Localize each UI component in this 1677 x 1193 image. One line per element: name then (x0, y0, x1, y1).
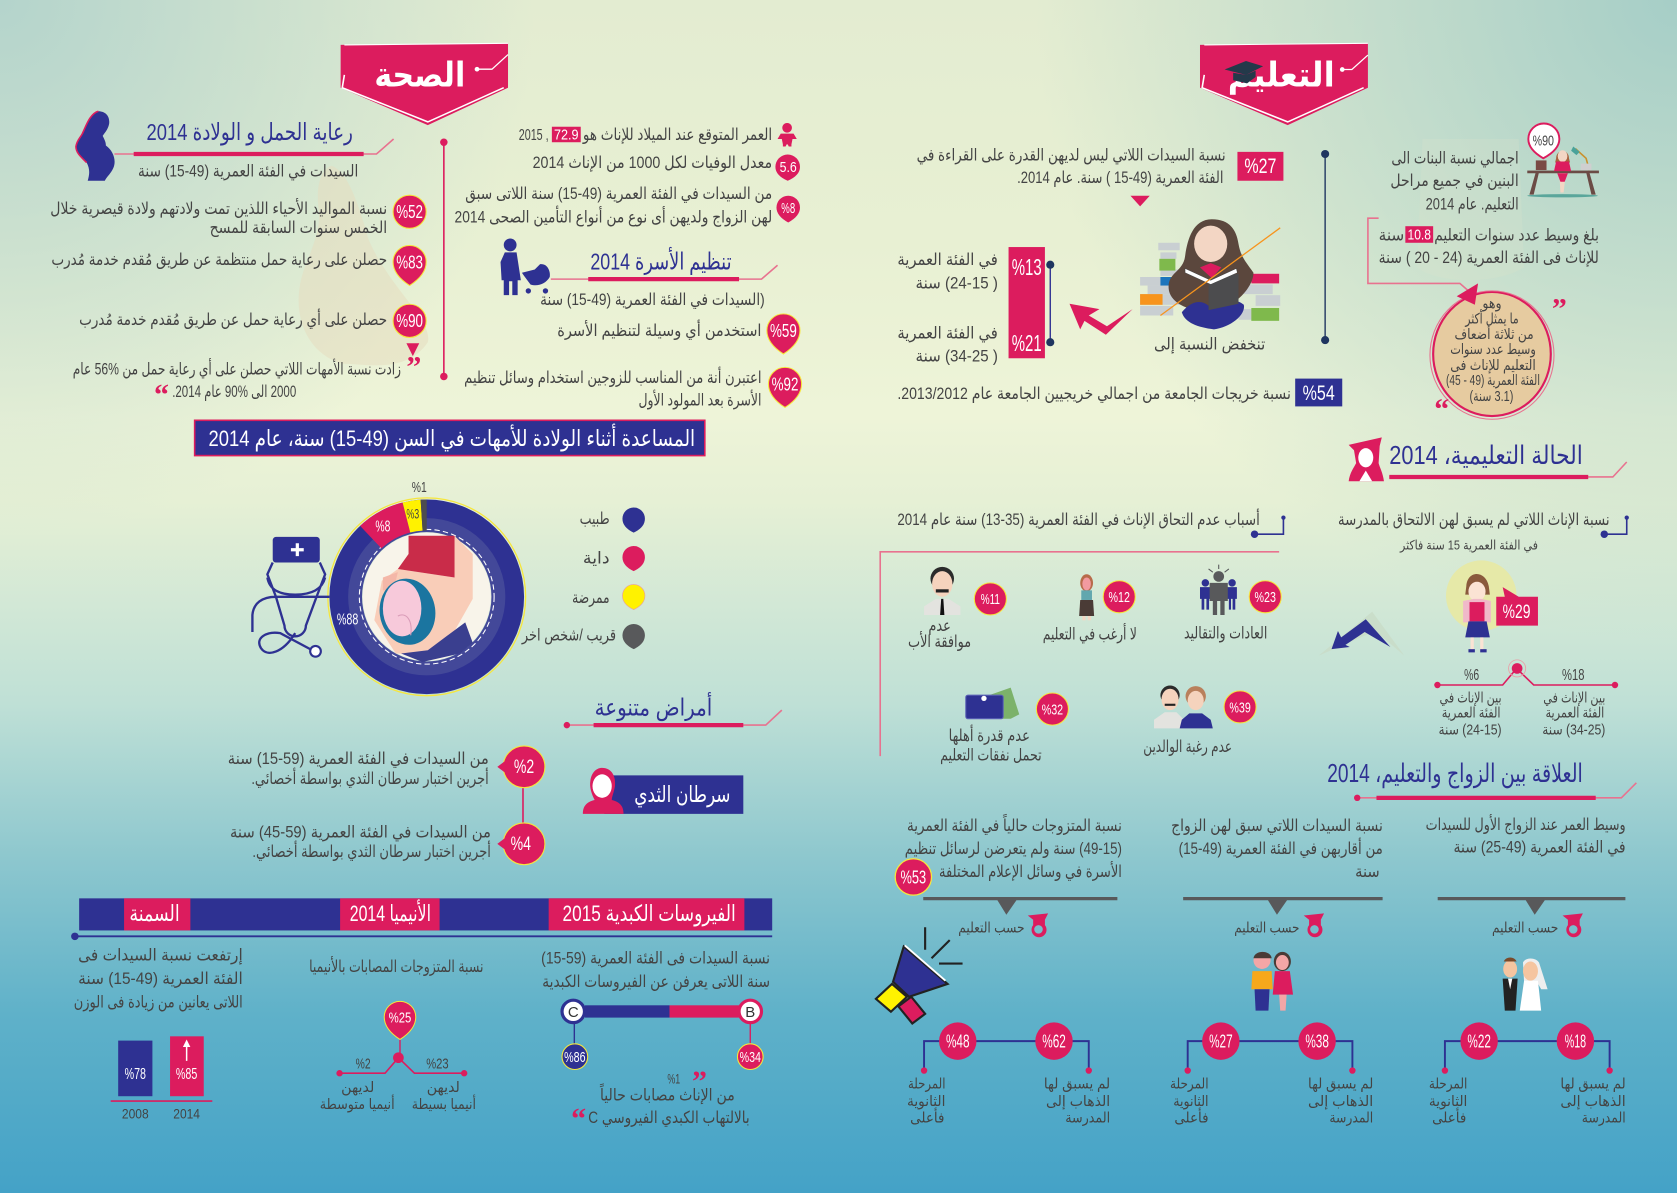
stat 4 (230, 822, 545, 865)
tree: age split: بين الإناث في (1543, 691, 1605, 707)
section: obesity (74, 945, 243, 1122)
stat 90: %90 (396, 311, 423, 331)
tree chart: %23 (426, 1055, 449, 1072)
stat 2: %2 (514, 757, 534, 778)
text: never enrolled: نسبة الإناث اللاتي لم يسبق لهن الالتحاق بالمدرسة (1338, 510, 1610, 530)
label: breast cancer: سرطان الثدي (634, 782, 730, 808)
header bar: obesity, anemia, hepatitis: الفيروسات الكبدية 2015 (563, 901, 736, 927)
heading rule (1389, 462, 1627, 477)
section: various diseases (228, 691, 782, 865)
column: family planning messages: فأعلى (910, 1107, 944, 1126)
tree: age split (1434, 660, 1618, 739)
bracket (1368, 218, 1468, 291)
section: anemia (309, 956, 483, 1113)
stat 27 box (1237, 152, 1283, 181)
stat 59: استخدمن أي وسيلة لتنظيم الأسرة (557, 319, 761, 341)
reason 23: العادات والتقاليد (1184, 623, 1267, 643)
stat 83: حصلن على رعاية حمل منتظمة عن طريق مُقدم خدمة مُدرب (51, 250, 387, 270)
column: family planning messages: %62 (1042, 1032, 1066, 1052)
heading rule (114, 139, 394, 154)
section: general health (455, 123, 800, 227)
legend: doctor: طبيب (580, 509, 610, 528)
callout circle: (3.1 سنة) (1470, 389, 1513, 405)
column: median age at marriage: لم يسبق لها (1560, 1077, 1626, 1093)
heading rule (1354, 783, 1636, 801)
age labels (897, 250, 998, 365)
label 8: %8 (375, 518, 390, 536)
arrow (1319, 612, 1404, 656)
label: breast cancer (583, 768, 743, 814)
icon: graduate woman (1349, 437, 1384, 481)
stat 92: %92 (772, 374, 798, 394)
heading: الحالة التعليمية، 2014 (1389, 442, 1583, 470)
icon: pregnant woman (76, 111, 115, 181)
stat 92: اعتبرن أنة من المناسب للزوجين استخدام وسائل تنظيم (464, 366, 761, 388)
note (571, 1065, 750, 1135)
reason 23: %23 (1255, 589, 1276, 606)
reason 39: عدم رغبة الوالدين (1143, 737, 1232, 757)
text: الفئة العمرية (49-15 ) سنة. عام 2014. (1017, 168, 1224, 188)
icon: girl at desk (1527, 147, 1599, 197)
reason 32 (940, 688, 1068, 765)
column: family planning messages: الأسرة في وسائل الإعلام المختلفة (939, 861, 1122, 882)
stat 83: %83 (396, 252, 423, 272)
icon: baby (778, 123, 797, 147)
banner: health: الصحة (374, 57, 465, 95)
section: marriage and education (876, 760, 1636, 1126)
arrow down (1130, 196, 1150, 206)
legend: midwife: داية (583, 549, 610, 568)
column: median age at marriage: %22 (1467, 1032, 1491, 1052)
header bar: obesity, anemia, hepatitis: السمنة (129, 901, 180, 926)
stat 92 (464, 366, 802, 410)
life expectancy (519, 125, 772, 145)
text: بلغ وسيط عدد سنوات التعليم (1434, 226, 1599, 246)
column: relatives marriage: من أقاربهن في الفئة العمرية (49-15) (1179, 837, 1383, 859)
stat 4: أجرين اختبار سرطان الثدي بواسطة أخصائي. (252, 840, 491, 862)
reason 11 (908, 567, 1006, 652)
label 1: %1 (412, 479, 427, 496)
section: educational status (880, 437, 1629, 765)
hepatitis bar (562, 1000, 763, 1069)
reason 32: تحمل نفقات التعليم (940, 745, 1042, 765)
text: سنة (1379, 226, 1404, 245)
text: never enrolled (1338, 510, 1610, 554)
text (1390, 149, 1519, 215)
stat 54 (897, 379, 1342, 406)
callout circle (1430, 283, 1567, 426)
note (73, 343, 421, 411)
callout circle: وهو (1481, 296, 1502, 312)
timeline line: education (1321, 150, 1329, 344)
tree chart: لديهن (427, 1080, 460, 1096)
stat 29 (1496, 587, 1538, 626)
note: 2000 الى %90 عام 2014. (172, 382, 296, 401)
note: “ (154, 378, 169, 411)
stat 52: الخمس سنوات السابقة للمسح (210, 218, 387, 238)
column: family planning messages: نسبة المتزوجات حالياً في الفئة العمرية (907, 813, 1122, 836)
note: زادت نسبة الأمهات اللاتي حصلن على أي رعاية حمل من %56 عام (73, 357, 401, 379)
column: median age at marriage: حسب التعليم (1492, 921, 1558, 937)
age labels: في الفئة العمرية (897, 323, 998, 343)
label 88: %88 (337, 611, 358, 629)
pin 90 (1528, 124, 1559, 158)
column: family planning messages: لم يسبق لها (1044, 1077, 1110, 1093)
note: من الإناث مصابات حالياً (599, 1083, 735, 1104)
icon: couple (1251, 952, 1293, 1011)
mortality (533, 153, 800, 181)
column: median age at marriage: %18 (1565, 1032, 1586, 1052)
illustration: girl reading (1140, 219, 1280, 329)
donut chart (328, 479, 526, 696)
stat 90: حصلن على أي رعاية حمل عن طريق مُقدم خدمة مُدرب (79, 308, 387, 330)
column: median age at marriage: المرحلة (1429, 1077, 1467, 1093)
column: family planning messages: %53 (901, 867, 926, 887)
column: family planning messages: الذهاب إلى (1046, 1094, 1110, 1110)
caption: تنخفض النسبة إلى (1154, 335, 1266, 354)
reason 32: %32 (1042, 701, 1063, 718)
age labels: ( 34-25) سنة (916, 346, 998, 365)
bar 13 and 21: %13 (1012, 254, 1042, 280)
column: median age at marriage: المدرسة (1582, 1110, 1626, 1126)
reason 39: %39 (1229, 699, 1251, 716)
column: relatives marriage: نسبة السيدات اللاتي سبق لهن الزواج (1171, 816, 1383, 836)
text (541, 949, 770, 992)
callout circle: التعليم للإناث فى (1450, 358, 1536, 374)
column: median age at marriage: في الفئة العمرية (49-25) سنة (1453, 837, 1626, 857)
tree chart: لديهن (341, 1080, 374, 1096)
life expectancy: 72.9 (554, 127, 579, 144)
reason 23 (1184, 565, 1281, 643)
stat 2: من السيدات في الفئة العمرية (59-15) سنة (228, 749, 489, 769)
insurance: من السيدات في الفئة العمرية (49-15) سنة اللاتى سبق (465, 184, 772, 204)
column: family planning messages: (49-15) سنة ولم يتعرضن لرسائل تنظيم (905, 839, 1122, 859)
life expectancy: 2015 , (519, 126, 549, 144)
stat 2: أجرين اختبار سرطان الثدي بواسطة أخصائي. (251, 767, 489, 789)
text: نسبة المتزوجات المصابات بالأنيميا (309, 956, 483, 977)
legend: doctor (580, 507, 645, 533)
stat 92: الأسرة بعد المولود الأول (639, 389, 761, 410)
reason 12 (1043, 574, 1137, 645)
age labels: ( 24-15) سنة (916, 274, 998, 293)
section: literacy (897, 145, 1342, 406)
tree chart: %25 (389, 1009, 411, 1026)
insurance: %8 (781, 200, 795, 217)
column: relatives marriage: الذهاب إلى (1308, 1094, 1373, 1110)
text: اللاتى يعانين من زيادة فى الوزن (74, 992, 243, 1012)
stat 52 (50, 195, 426, 238)
column: median age at marriage: الثانوية (1429, 1094, 1467, 1110)
hepatitis bar: %34 (740, 1049, 761, 1066)
hepatitis bar: B (745, 1004, 755, 1021)
timeline line: health (440, 138, 448, 380)
hepatitis bar: C (568, 1004, 579, 1021)
banner: health (341, 43, 508, 125)
bar chart: %85 (176, 1065, 197, 1083)
reason 12: لا أرغب في التعليم (1043, 623, 1137, 645)
callout circle: الفئة العمرية (49 - 45) (1446, 373, 1540, 389)
tree: age split: الفئة العمرية (1545, 706, 1604, 722)
reason 39 (1143, 686, 1256, 757)
icon: bride and groom (1503, 957, 1548, 1011)
connector (522, 786, 524, 823)
stat 59: %59 (770, 321, 797, 341)
column: relatives marriage: المدرسة (1329, 1110, 1373, 1126)
bar chart: %78 (125, 1065, 146, 1083)
text: 10.8 (1407, 227, 1431, 244)
column: family planning messages: المدرسة (1065, 1110, 1110, 1126)
banner: education: التعليم (1228, 57, 1335, 96)
stat 4: من السيدات في الفئة العمرية (59-45) سنة (230, 822, 491, 842)
header bar: obesity, anemia, hepatitis: الأنيميا 2014 (350, 899, 431, 926)
column: relatives marriage: المرحلة (1170, 1077, 1209, 1093)
tree chart: أنيميا بسيطة (412, 1094, 476, 1113)
reason 12: %12 (1109, 589, 1130, 606)
stat 90 (79, 304, 426, 337)
stat 54: %54 (1303, 381, 1335, 405)
text: never enrolled: في الفئة العمرية 15 سنة فاكثر (1399, 538, 1538, 554)
tree chart: %2 (356, 1055, 371, 1072)
tree chart: أنيميا متوسطة (320, 1094, 395, 1113)
life expectancy: العمر المتوقع عند الميلاد للإناث هو (582, 125, 772, 145)
note: “ (571, 1102, 586, 1135)
heading: تنظيم الأسرة 2014 (590, 247, 732, 276)
stat 83 (51, 245, 426, 286)
stat 52: نسبة المواليد الأحياء اللذين تمت ولادتهم ولادة قيصرية خلال (50, 198, 387, 219)
bar chart: 2008 (122, 1106, 149, 1122)
tree: age split: %6 (1464, 666, 1479, 684)
reason 11: موافقة الأب (908, 631, 971, 652)
callout circle: من ثلاثة أضعاف (1455, 324, 1534, 343)
column: relatives marriage: لم يسبق لها (1308, 1077, 1373, 1093)
frame (880, 552, 1279, 756)
tree: age split: (34-25) سنة (1542, 723, 1605, 739)
section: gender parity (1390, 124, 1599, 215)
column: relatives marriage: %38 (1305, 1032, 1329, 1052)
reason 11: عدم (928, 616, 951, 635)
icon: mother and pram (501, 238, 550, 295)
heading rule (564, 710, 782, 728)
text (74, 945, 243, 1012)
text: إرتفعت نسبة السيدات فى (78, 945, 243, 965)
text: reasons: أسباب عدم التحاق الإناث في الفئة العمرية (35-13) سنة عام 2014 (897, 508, 1260, 530)
tree chart (320, 1001, 476, 1113)
label 3: %3 (406, 506, 419, 522)
illustration: pregnant belly (374, 536, 473, 662)
text: سنة اللاتى يعرفن عن الفيروسات الكبدية (542, 972, 770, 992)
icon: doctor with stethoscope (252, 537, 329, 657)
subtitle: السيدات في الفئة العمرية (49-15) سنة (138, 161, 358, 181)
column: median age at marriage: الذهاب إلى (1560, 1094, 1626, 1110)
stat 27 box: %27 (1244, 154, 1276, 178)
mortality: 5.6 (780, 159, 797, 176)
tree: age split: بين الإناث في (1440, 691, 1502, 707)
legend (521, 507, 645, 649)
callout circle: وسيط عدد سنوات (1450, 342, 1536, 358)
legend: relative: قريب /شخص اخر (521, 626, 616, 646)
section: pregnancy care (50, 111, 426, 411)
stat 4: %4 (511, 834, 531, 855)
title bar: childbirth assistance (195, 420, 705, 456)
section: family planning (464, 238, 802, 410)
note: ” (406, 350, 421, 383)
tree: age split: الفئة العمرية (1442, 706, 1501, 722)
note: ” (692, 1065, 707, 1098)
stat 59 (557, 314, 800, 354)
legend: nurse (572, 584, 645, 610)
banner: education (1200, 43, 1368, 125)
tree: age split: (24-15) سنة (1438, 723, 1502, 739)
icon: megaphone (876, 927, 963, 1023)
heading rule (551, 265, 778, 279)
text: البنين في جميع مراحل (1390, 171, 1519, 191)
stat 54: نسبة خريجات الجامعة من اجمالي خريجيين الجامعة عام 2013/2012. (897, 384, 1291, 404)
heading: العلاقة بين الزواج والتعليم، 2014 (1327, 760, 1583, 789)
bar chart (111, 1036, 212, 1122)
text: الفئة العمرية (49-15) سنة (78, 969, 243, 989)
column: relatives marriage (1170, 816, 1383, 1126)
stat 2 (228, 746, 545, 789)
legend: nurse: ممرضة (572, 588, 610, 608)
column: family planning messages: حسب التعليم (958, 921, 1025, 937)
bar 13 and 21 (1009, 247, 1054, 358)
column: family planning messages: الثانوية (907, 1094, 945, 1110)
title bar: childbirth assistance: المساعدة أثناء الولادة للأمهات في السن (49-15) سنة، عام 2014 (209, 424, 695, 452)
column: relatives marriage: سنة (1355, 862, 1380, 881)
column: family planning messages (876, 813, 1122, 1126)
bar 13 and 21: %21 (1012, 330, 1042, 356)
text (1379, 226, 1599, 268)
stat 29: %29 (1503, 602, 1530, 623)
insurance: لهن الزواج ولديهن أى نوع من أنواع التأمين الصحى 2014 (455, 205, 772, 227)
age labels: في الفئة العمرية (897, 250, 998, 270)
heading: رعاية الحمل و الولادة 2014 (147, 119, 353, 146)
text: نسبة السيدات فى الفئة العمرية (59-15) (541, 949, 770, 969)
callout circle: ما يمثل أكثر (1464, 309, 1519, 328)
section: hepatitis (541, 949, 770, 1135)
column: median age at marriage (1426, 814, 1626, 1126)
column: median age at marriage: فأعلى (1432, 1107, 1466, 1126)
column: family planning messages: %48 (946, 1032, 970, 1052)
callout circle: “ (1434, 393, 1449, 426)
connector right (1601, 515, 1629, 538)
text: نسبة السيدات اللاتي ليس لديهن القدرة على القراءة في (917, 145, 1226, 165)
column: relatives marriage: الثانوية (1173, 1094, 1209, 1110)
text: اجمالي نسبة البنات الى (1391, 149, 1519, 169)
reason 11: %11 (981, 591, 1000, 608)
hepatitis bar: %86 (564, 1049, 586, 1066)
text: للإناث فى الفئة العمرية (24 - 20 ) سنة (1379, 248, 1599, 268)
note: %1 (667, 1070, 680, 1086)
callout circle: ” (1552, 293, 1567, 326)
arrow: check (1070, 304, 1133, 335)
tree: age split: %18 (1562, 666, 1585, 684)
bar chart: 2014 (173, 1106, 200, 1122)
connector left (1251, 515, 1286, 538)
column: relatives marriage: فأعلى (1174, 1107, 1209, 1126)
column: relatives marriage: حسب التعليم (1234, 921, 1299, 937)
note: بالالتهاب الكبدي الفيروسي C (588, 1108, 750, 1128)
column: relatives marriage: %27 (1209, 1032, 1233, 1052)
heading: أمراض متنوعة (595, 691, 712, 721)
header bar: obesity, anemia, hepatitis (71, 898, 772, 940)
illustration: schoolgirl (1446, 560, 1517, 652)
text: التعليم. عام 2014 (1426, 195, 1519, 215)
section: years of schooling (1368, 218, 1599, 426)
column: family planning messages: المرحلة (908, 1077, 945, 1093)
stat 52: %52 (396, 202, 423, 222)
reason 32: عدم قدرة أهلها (949, 724, 1030, 746)
mortality: معدل الوفيات لكل 1000 من الإناث 2014 (533, 153, 772, 173)
pin 90: %90 (1533, 132, 1554, 149)
subtitle: (السيدات في الفئة العمرية (49-15) سنة (540, 290, 765, 310)
legend: midwife (583, 546, 645, 571)
text (917, 145, 1226, 188)
insurance (455, 184, 800, 227)
